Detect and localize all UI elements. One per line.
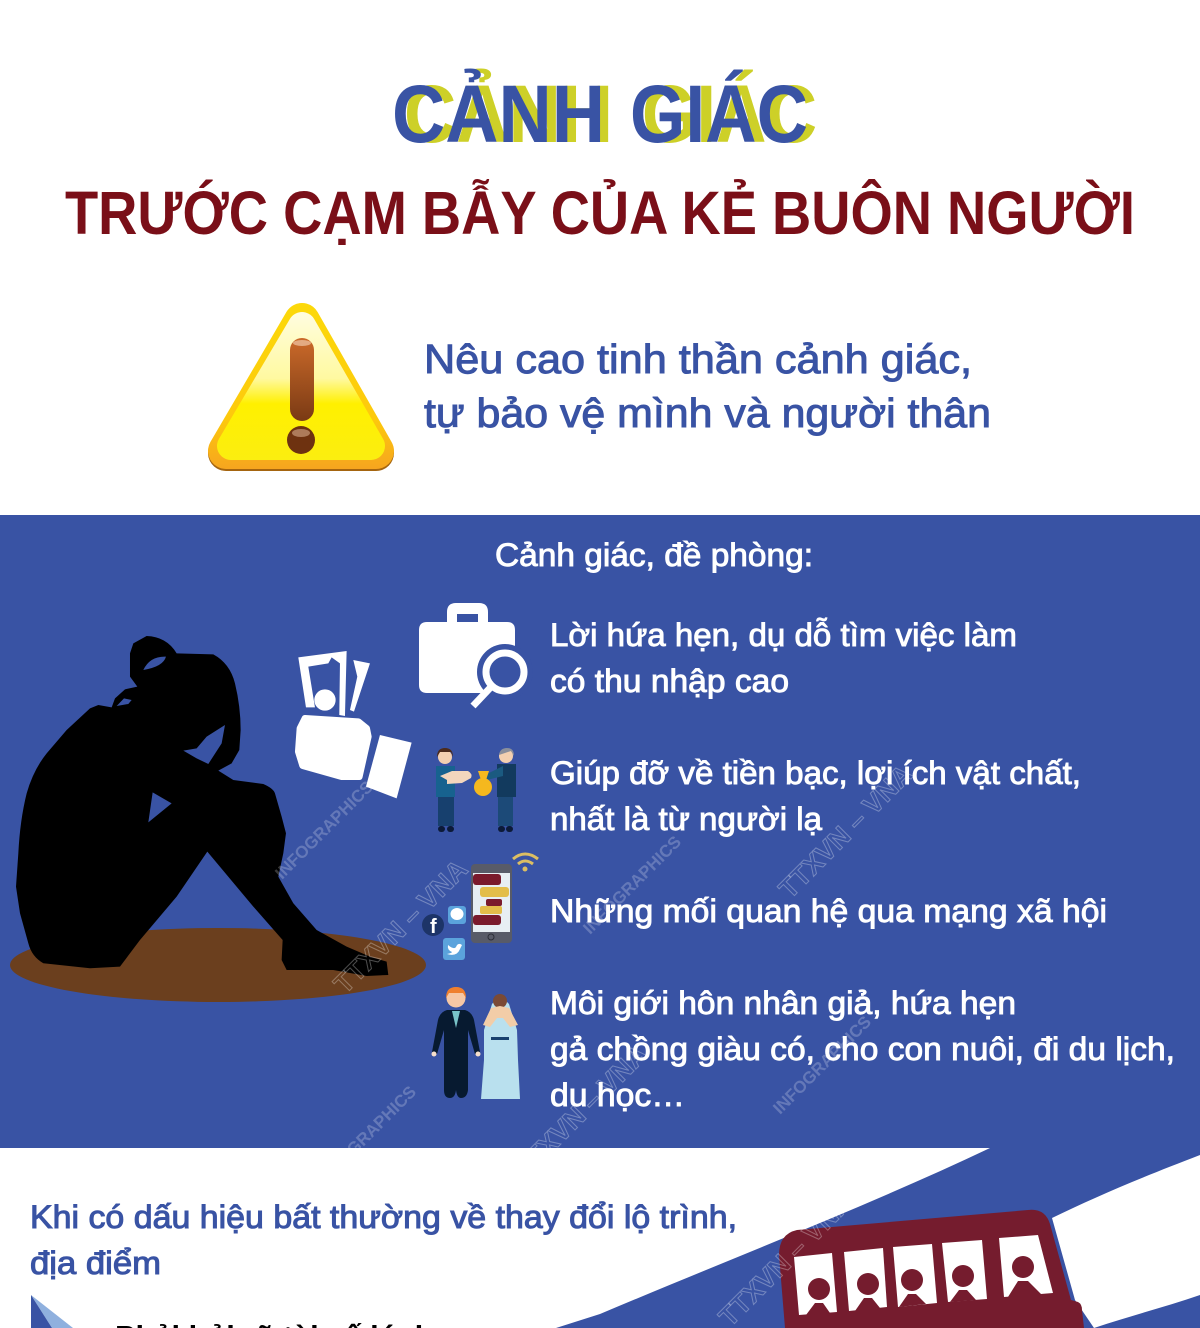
- title: CẢNH GIÁC: CẢNH: [392, 69, 605, 160]
- illustration: sitting silhouette: [16, 636, 388, 976]
- item 1: job offer: [419, 603, 1017, 706]
- watermarks: INFOGRAPHICS: [769, 1012, 875, 1118]
- text block: warning message: Nêu cao tinh thần cảnh giác,: [424, 336, 972, 382]
- watermarks: [271, 759, 918, 1328]
- heading: abnormal route signs: địa điểm: [30, 1245, 161, 1281]
- item 3: social networks: [422, 854, 1107, 960]
- text: job offer: có thu nhập cao: [550, 663, 789, 699]
- icon: phone with social apps: f: [430, 916, 437, 938]
- text block: warning message: tự bảo vệ mình và người thân: [424, 390, 991, 436]
- text: job offer: [550, 617, 1017, 699]
- heading: abnormal route signs: Khi có dấu hiệu bất thường về thay đổi lộ trình,: [30, 1199, 737, 1235]
- text: money help: Giúp đỡ về tiền bạc, lợi ích vật chất,: [550, 755, 1081, 791]
- watermarks: TTXVN – VNA: [773, 759, 918, 904]
- icon: corner triangle bullet: [31, 1295, 73, 1328]
- floor ellipse: [10, 928, 426, 1002]
- watermarks: INFOGRAPHICS: [271, 777, 377, 883]
- item 4: fake marriage brokers: [432, 985, 1175, 1113]
- text: fake marriage brokers: gả chồng giàu có, cho con nuôi, đi du lịch,: [550, 1031, 1175, 1067]
- heading: watch out: Cảnh giác, đề phòng:: [495, 537, 813, 573]
- text block: warning message: [424, 336, 991, 436]
- icon: two men exchanging money bag: [436, 748, 516, 832]
- icon: hand holding money: [298, 651, 412, 798]
- item 2: money help: [436, 748, 1081, 837]
- panel: blue background with diagonal band: [0, 515, 1200, 1328]
- heading: abnormal route signs: [30, 1199, 737, 1281]
- title: CẢNH GIÁC: [392, 69, 817, 160]
- bus passengers: [806, 1256, 1042, 1315]
- watermarks: TTXVN – VNA: [713, 1187, 858, 1328]
- text: job offer: Lời hứa hẹn, dụ dỗ tìm việc làm: [550, 617, 1017, 653]
- illustration: bus: [779, 1210, 1084, 1328]
- icon: groom and bride: [432, 987, 520, 1099]
- watermarks: TTXVN – VNA: [508, 1039, 653, 1184]
- text: fake marriage brokers: [550, 985, 1175, 1113]
- text: money help: nhất là từ người lạ: [550, 801, 822, 837]
- text: social networks: Những mối quan hệ qua mạng xã hội: [550, 893, 1107, 929]
- watermarks: TTXVN – VNA: [328, 854, 473, 999]
- title: CẢNH GIÁC: GIÁC: [642, 69, 817, 160]
- icon: warning triangle: [226, 321, 376, 454]
- title: CẢNH GIÁC: CẢNH: [404, 69, 613, 160]
- icon: phone with social apps: [422, 854, 538, 960]
- text: money help: [550, 755, 1081, 837]
- bus windows: [794, 1235, 1053, 1315]
- text: fake marriage brokers: du học…: [550, 1077, 685, 1113]
- text: fake marriage brokers: Môi giới hôn nhân giả, hứa hẹn: [550, 985, 1016, 1021]
- icon: briefcase with magnifier: [419, 603, 533, 706]
- watermarks: INFOGRAPHICS: [314, 1082, 420, 1188]
- watermarks: INFOGRAPHICS: [579, 832, 685, 938]
- title: CẢNH GIÁC: GIÁC: [630, 69, 808, 160]
